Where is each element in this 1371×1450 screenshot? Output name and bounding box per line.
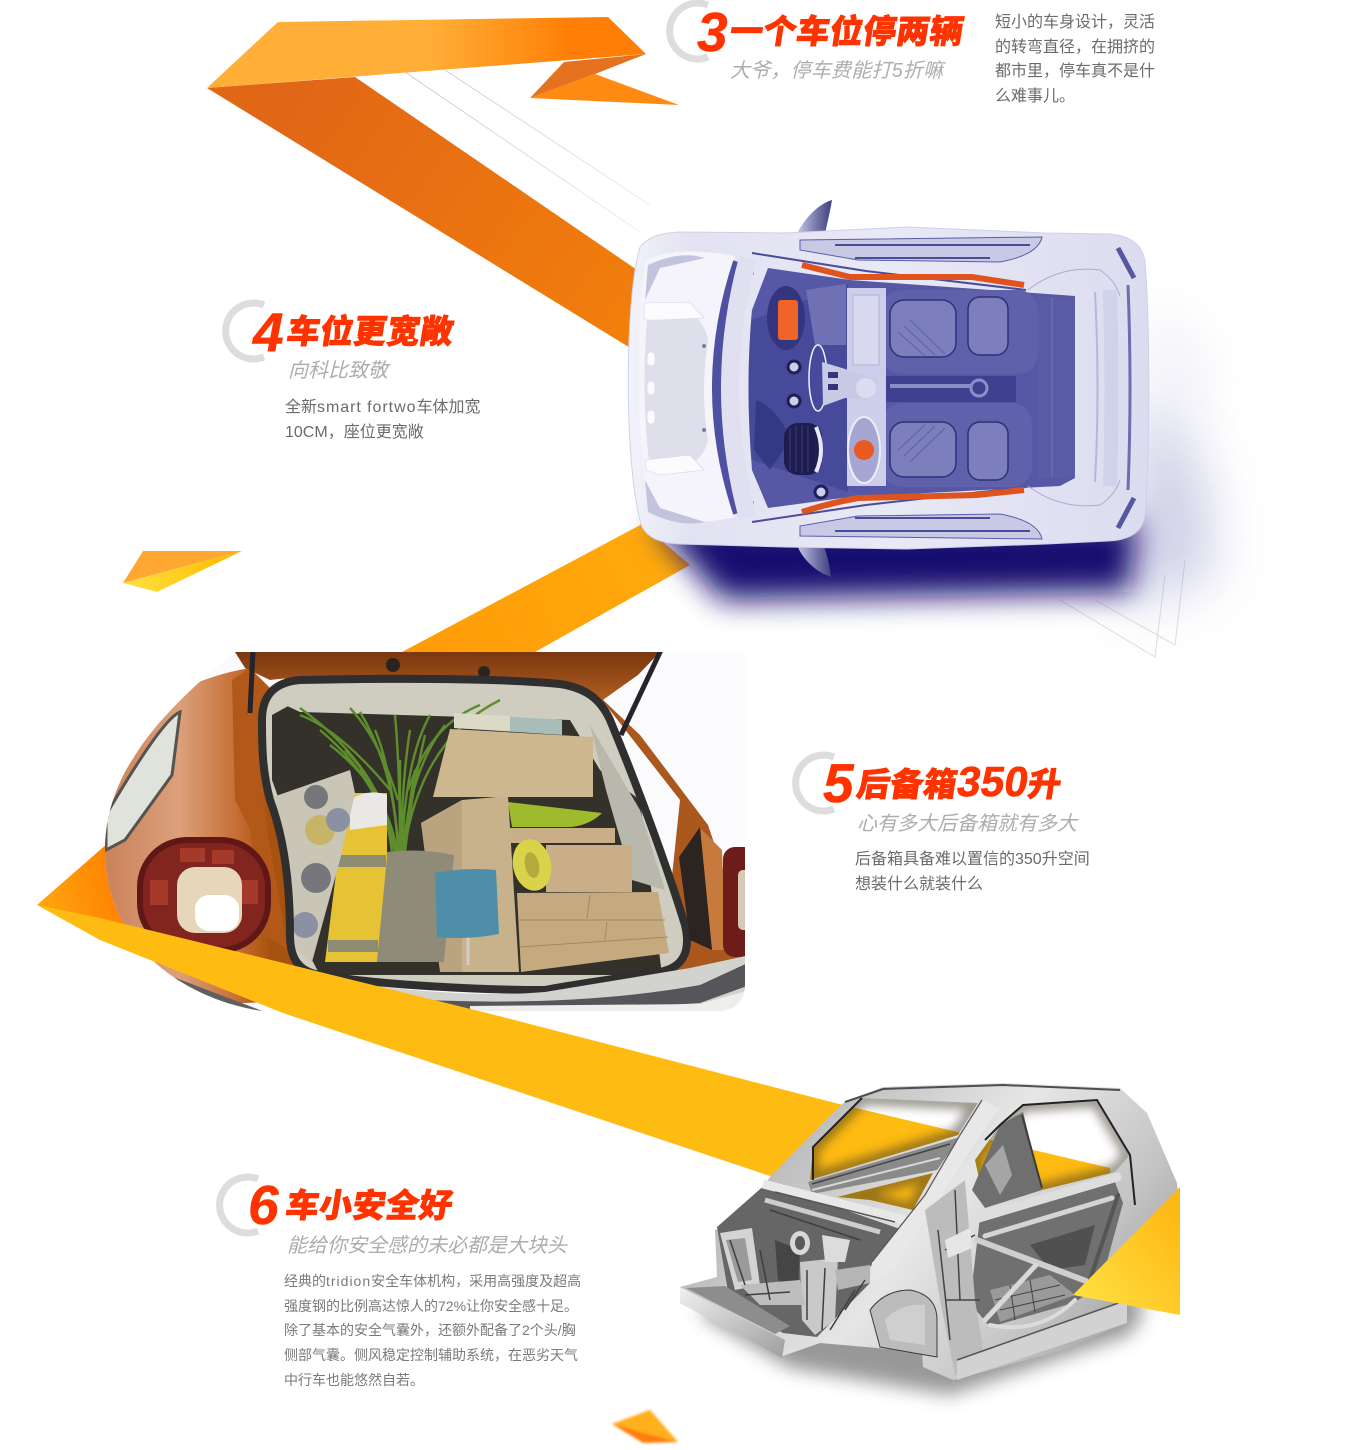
boot interior contents <box>266 682 683 986</box>
cross bars <box>972 1177 1118 1327</box>
body 3 <box>995 8 1155 105</box>
pedal discs <box>788 361 827 498</box>
section 6 text <box>216 1174 581 1388</box>
bumper <box>155 955 750 1012</box>
car shadow <box>652 300 1215 610</box>
car x-ray top view with shadow <box>628 200 1215 610</box>
green bowl <box>508 802 602 827</box>
bottom small blurred triangle <box>612 1410 678 1443</box>
trunk photo <box>100 650 755 1015</box>
body 3: 的转弯直径，在拥挤的 <box>995 33 1155 57</box>
left orange triangle behind trunk photo <box>37 843 125 930</box>
body 6: 经典的tridion安全车体机构，采用高强度及超高 <box>284 1271 581 1291</box>
yellow bag <box>325 792 387 962</box>
pattern pillow <box>273 770 355 962</box>
right lamp <box>723 847 745 957</box>
rear compartment interior <box>970 1177 1123 1327</box>
lid grommets <box>386 658 490 676</box>
body 4 <box>285 398 480 442</box>
rear axle tunnel <box>886 376 1016 402</box>
engine bay detail <box>720 1210 870 1335</box>
car body <box>628 227 1149 549</box>
plant leaves <box>300 700 500 852</box>
subheading 5: 心有多大后备箱就有多大 <box>857 813 1077 835</box>
side sill <box>957 1300 1127 1380</box>
section 3 text <box>666 0 1155 105</box>
hinges and hood dots <box>644 302 704 475</box>
blue lamp <box>435 869 499 965</box>
body 4: 全新smart fortwo车体加宽 <box>285 399 480 416</box>
blower motor <box>784 423 822 475</box>
engine bay shading <box>748 284 848 492</box>
central bulkhead strip <box>847 288 886 486</box>
dark orange ribbon diagonal fold <box>207 77 640 349</box>
engine bay <box>717 1183 903 1337</box>
rear floor panel <box>1038 297 1075 478</box>
grey vase <box>377 851 454 962</box>
orange side beam bottom <box>802 490 1024 512</box>
numeral 6: 6 <box>248 1174 279 1236</box>
steel body frame <box>680 1083 1180 1395</box>
body 5: 后备箱具备难以置信的350升空间 <box>855 851 1090 868</box>
battery orange <box>778 300 798 340</box>
rear structure <box>1028 248 1134 528</box>
body 3: 都市里，停车真不是什 <box>995 57 1155 81</box>
numeral 4: 4 <box>253 301 284 363</box>
body 6: 中行车也能悠然自若。 <box>284 1372 424 1388</box>
right mirror <box>796 541 831 577</box>
section 5 text <box>792 752 1090 893</box>
tail lamp <box>137 837 271 953</box>
top carton <box>433 729 593 797</box>
tailgate lid <box>235 652 660 702</box>
photo background <box>105 852 124 924</box>
subheading 3: 大爷，停车费能打5折嘛 <box>730 54 943 83</box>
inner window shadow <box>810 1098 1130 1210</box>
door gap <box>679 827 712 950</box>
orange band from car to trunk photo <box>402 524 690 652</box>
cartons right <box>510 828 669 972</box>
body 5 <box>855 850 1090 893</box>
body 5: 想装什么就装什么 <box>855 876 983 893</box>
struts <box>250 650 661 735</box>
decorative thin lines lower <box>1060 560 1185 657</box>
heading 3: 一个车位停两辆 <box>727 13 966 50</box>
seat one <box>882 290 1038 374</box>
cabin interior floor <box>748 268 1075 508</box>
rear window <box>106 712 180 850</box>
rolled blanket <box>454 713 562 735</box>
numeral 3: 3 <box>697 1 728 63</box>
horn orange <box>854 440 874 460</box>
front bumper bar <box>680 1287 785 1358</box>
seat and pillar inside door <box>972 1112 1042 1208</box>
cowl bar <box>763 1184 905 1220</box>
top orange ribbon <box>207 17 679 105</box>
yellow triangle over frame <box>1073 1187 1180 1315</box>
wheel arch <box>870 1290 937 1357</box>
tall carton <box>421 796 519 972</box>
yellow ribbon <box>37 905 1120 1290</box>
side boot trim <box>590 725 665 890</box>
car body right <box>598 695 750 990</box>
decorative thin lines upper <box>405 70 650 232</box>
door panels <box>800 237 1042 539</box>
yellow roll <box>512 839 552 891</box>
A pillar <box>870 1100 1000 1283</box>
windscreen arc <box>717 262 738 513</box>
left mirror <box>796 200 832 236</box>
B pillar hinge column <box>925 1180 985 1375</box>
subheading 6: 能给你安全感的未必都是大块头 <box>287 1235 567 1257</box>
body 3: 么难事儿。 <box>995 88 1075 105</box>
body 6: 强度钢的比例高达惊人的72%让你安全感十足。 <box>284 1298 578 1314</box>
console plate <box>809 345 878 411</box>
hood shading <box>639 251 735 522</box>
small orange-yellow triangle <box>123 551 242 592</box>
frame silhouette <box>680 1083 1180 1380</box>
ring 4 <box>222 300 266 362</box>
frame shadow <box>700 1280 1145 1395</box>
heading 4: 车位更宽敞 <box>284 313 457 350</box>
numeral 5: 5 <box>823 752 854 814</box>
windshield beam <box>808 1137 960 1194</box>
ring 6 <box>216 1174 260 1236</box>
seat two <box>882 403 1032 487</box>
boot seal <box>262 679 687 990</box>
body 6: 除了基本的安全气囊外，还额外配备了2个头/胸 <box>284 1320 576 1340</box>
ring 5 <box>792 752 836 814</box>
body 6 <box>284 1271 581 1388</box>
heading 5: 后备箱350升 <box>854 758 1064 805</box>
body 3: 短小的车身设计，灵活 <box>995 8 1155 32</box>
subheading 4: 向科比致敬 <box>288 360 388 382</box>
steering wheel <box>848 417 880 483</box>
car body left <box>100 668 300 1011</box>
orange side beam top <box>802 265 1024 285</box>
section 4 text <box>222 300 480 442</box>
body 4: 10CM，座位更宽敞 <box>285 418 424 442</box>
ring 3 <box>666 0 710 62</box>
body 6: 侧部气囊。侧风稳定控制辅助系统，在恶劣天气 <box>284 1345 578 1365</box>
heading 6: 车小安全好 <box>283 1187 456 1224</box>
roof edge and door frame outline <box>813 1085 1135 1205</box>
